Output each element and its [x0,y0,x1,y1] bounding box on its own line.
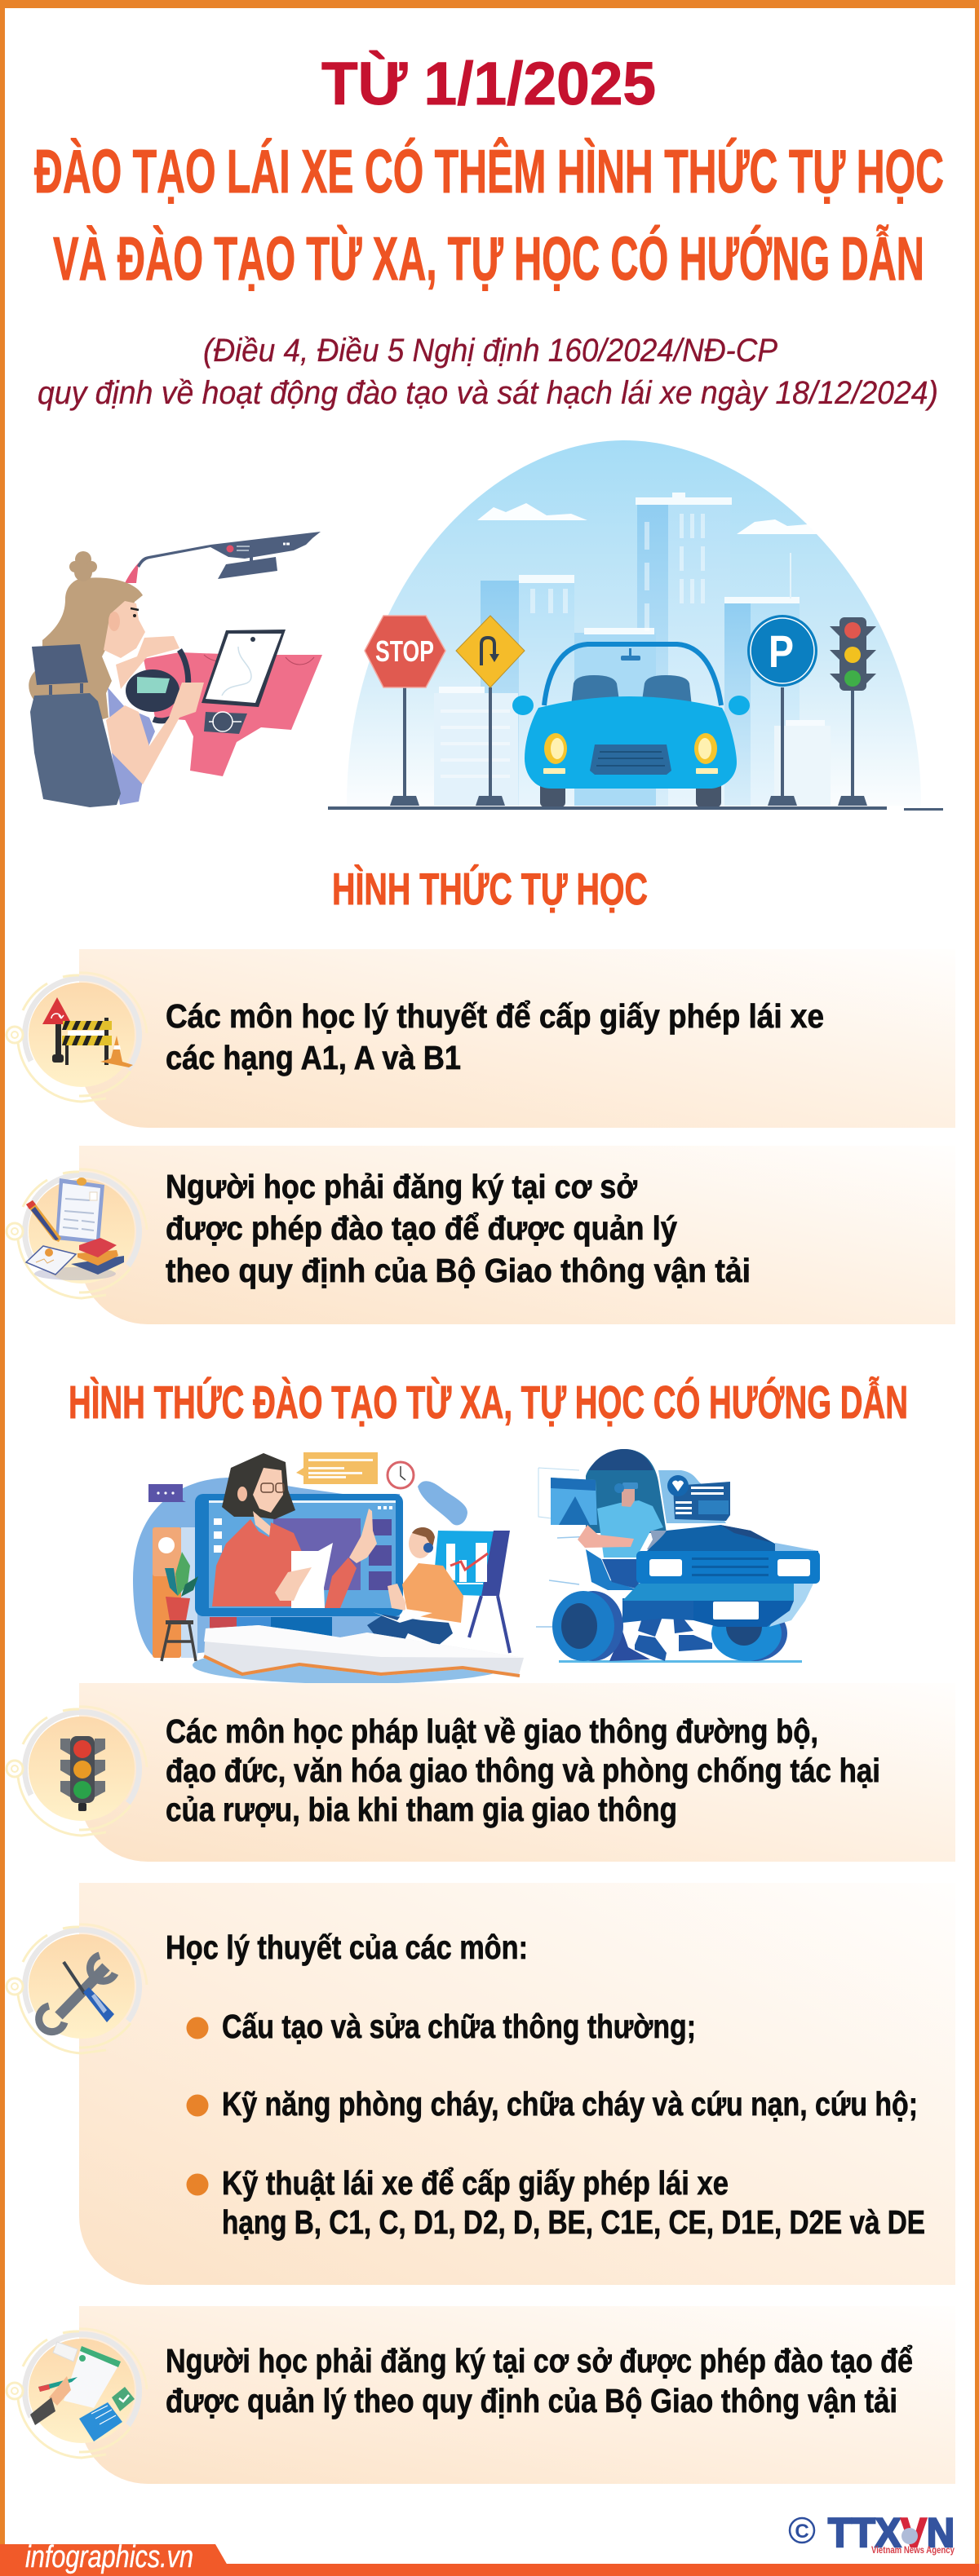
panel: law subjects [7,1683,955,1862]
text: Các môn học lý thuyết để cấp giấy phép lái xe [166,997,824,1035]
legal reference subtitle: (Điều 4, Điều 5 Nghị định 160/2024/NĐ-CP [203,333,777,369]
u-turn sign [456,616,525,806]
windshield [658,1470,726,1523]
bullet: vehicle structure: Cấu tạo và sửa chữa thông thường; [222,2008,696,2045]
monitor [195,1494,403,1638]
logo: TTXVN: C [795,2521,809,2543]
steering wheel [126,650,188,721]
dashboard [144,652,322,776]
face [104,601,145,658]
badge: paperwork icon [7,2329,147,2458]
plant and stool [162,1552,198,1661]
clock [388,1462,414,1488]
legal reference subtitle [38,333,938,411]
sky dome [347,440,921,806]
clouds [477,503,831,534]
teacher [212,1453,377,1608]
panel: theory of subjects list [7,1883,955,2285]
body and top [108,687,155,805]
legal reference subtitle: quy định về hoạt động đào tạo và sát hạch lái xe ngày 18/12/2024) [38,375,938,411]
text [166,1712,880,1828]
forearm up and hand [116,636,179,689]
car [512,644,750,807]
illustration: VR driving car [536,1449,820,1663]
text: của rượu, bia khi tham gia giao thông [166,1791,677,1828]
bullet: driving technique: Kỹ thuật lái xe để cấp giấy phép lái xe [222,2164,729,2202]
text [166,2342,913,2419]
title block [34,50,944,293]
text: các hạng A1, A và B1 [166,1039,461,1076]
stop sign: STOP [375,634,434,668]
panel: registration distance [7,2306,955,2484]
buildings [434,493,831,806]
student [367,1527,463,1646]
console [204,712,247,734]
illustration: city scene with car and road signs [328,440,943,811]
head silhouette [586,1449,667,1533]
illustration: online teacher and student [133,1452,524,1684]
text: Người học phải đăng ký tại cơ sở [166,1168,638,1205]
text: Các môn học pháp luật về giao thông đường bộ, [166,1712,818,1750]
title date line: TỪ 1/1/2025 [321,50,656,117]
purple bubble [148,1484,186,1502]
chart board [432,1531,510,1653]
blue blob [133,1478,400,1658]
dashboard details [204,655,314,665]
hair bun [69,551,97,581]
bullet: driving technique [186,2164,925,2241]
open book [204,1625,524,1677]
text [166,1168,751,1289]
badge: barrier icon [7,973,147,1102]
ear and eye [109,608,139,631]
ground line [559,1660,802,1663]
logo: TTXVN: TTXVN [828,2510,955,2556]
heading: self-study: HÌNH THỨC TỰ HỌC [332,864,648,914]
seat [30,693,121,807]
traffic light [830,617,876,806]
parking sign: P [769,625,794,677]
orange binders [153,1527,197,1658]
top right blob [418,1481,467,1525]
head dark top [589,1449,653,1470]
text [166,997,824,1076]
speech bubble [296,1452,378,1484]
speed lines [536,1536,593,1627]
hair [29,577,143,722]
badge: wrench and screwdriver icon [7,1924,147,2053]
ground shadow [193,1646,511,1684]
person [578,1482,712,1661]
panel: theory subjects [7,949,955,1128]
text: được phép đào tạo để được quản lý [166,1209,677,1247]
car body [622,1525,820,1627]
footer bar: infographics.vn [25,2540,193,2574]
tablet [202,630,286,707]
text intro: Học lý thuyết của các môn: [166,1929,528,1966]
badge: traffic light icon [7,1707,147,1836]
windshield frame and mirror [125,532,321,583]
logo: TTXVN: Vietnam News Agency [871,2544,955,2556]
ground line [328,806,943,811]
wheels [552,1591,787,1661]
arm [106,683,204,784]
text: theo quy định của Bộ Giao thông vận tải [166,1252,751,1289]
illustration: woman driving with tablet [29,532,322,807]
badge: clipboard and books icon [7,1169,147,1298]
footer bar [0,2540,979,2576]
panel: registration [7,1146,955,1324]
holographic panels [538,1468,730,1525]
stop sign [365,616,445,806]
headrest [32,644,88,695]
parking sign [747,615,817,806]
